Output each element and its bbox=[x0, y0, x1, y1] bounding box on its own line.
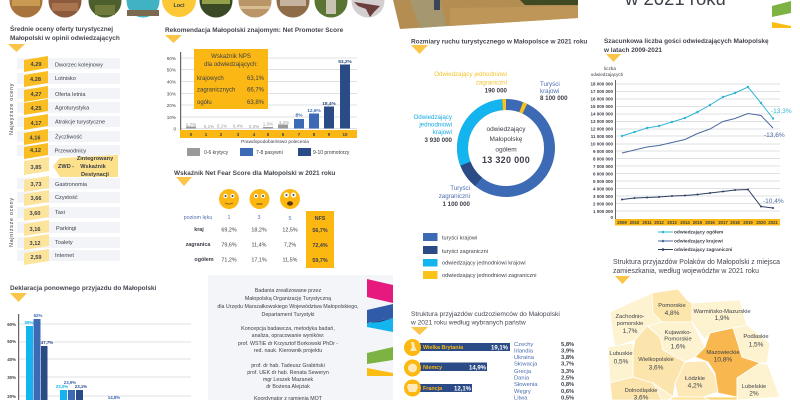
bar chart: NPS: 10% bbox=[167, 115, 176, 120]
bar chart: NPS: 8% bbox=[296, 112, 303, 118]
line chart: 2017 bbox=[718, 220, 728, 225]
ratings list: 4,28 bbox=[30, 77, 41, 83]
series: krajowi bbox=[622, 114, 773, 153]
photo strip: circular thumbnails bbox=[10, 0, 384, 18]
list: other countries: Grecja bbox=[514, 369, 532, 375]
ratings list: Toalety bbox=[55, 240, 73, 246]
bar chart: NPS: 30% bbox=[167, 92, 176, 96]
line chart bbox=[590, 80, 792, 226]
bar chart: NPS: 7 bbox=[298, 132, 301, 137]
icon: calm face bbox=[219, 189, 239, 209]
bars: top countries: 19,1% bbox=[491, 346, 509, 352]
ratings list: Czystość bbox=[55, 195, 78, 201]
line chart: 2020 bbox=[756, 220, 766, 225]
table: fear levels: 59,7% bbox=[312, 258, 328, 264]
map labels: Wielkopolskie bbox=[638, 357, 674, 363]
line chart: 17 000 000 bbox=[590, 89, 613, 94]
map labels: 0,5% bbox=[614, 358, 629, 366]
legend: odwiedzający krajowi bbox=[674, 238, 723, 244]
line chart: 2010 bbox=[630, 220, 640, 225]
ratings list: 4,25 bbox=[31, 106, 41, 112]
bar chart: return declaration: 62% bbox=[34, 313, 42, 318]
legend: odwiedzający ogółem bbox=[674, 230, 723, 236]
label: turyści krajowi: krajowi bbox=[540, 88, 559, 95]
callout: NPS values: 63,8% bbox=[247, 100, 265, 106]
photo: landscape banner bbox=[393, 0, 578, 29]
map labels: 4,8% bbox=[665, 310, 680, 317]
ratings list: Lotnisko bbox=[55, 76, 76, 82]
bar chart: NPS: 18,4% bbox=[322, 101, 337, 107]
label: turyści zagraniczni bbox=[439, 185, 471, 208]
line chart: 13 000 000 bbox=[590, 119, 613, 124]
map labels: Pomorskie bbox=[658, 303, 686, 309]
marker triangle bbox=[176, 177, 192, 186]
list: other countries: 5,8% bbox=[561, 342, 574, 348]
ratings list: 4,29 bbox=[31, 62, 41, 68]
series: zagraniczni bbox=[622, 190, 773, 208]
ratings list: Taxi bbox=[55, 210, 65, 216]
panel: research credits bbox=[208, 275, 393, 400]
table: fear levels: 12,5% bbox=[282, 228, 298, 234]
map labels: Łódzkie bbox=[685, 376, 705, 382]
map labels: 1,6% bbox=[671, 344, 686, 350]
list: other countries: Słowacja bbox=[514, 362, 538, 368]
map labels: Zachodnio- bbox=[615, 314, 645, 320]
heading: visitors trend: Szacunkowa liczba gości odwiedzających Małopolskę bbox=[604, 38, 769, 45]
label: turyści krajowi: 8 100 000 bbox=[540, 95, 568, 102]
line chart: 2009 bbox=[617, 220, 627, 225]
table: fear levels: NFS bbox=[315, 216, 326, 222]
callout: NPS values: dla odwiedzających: bbox=[204, 62, 258, 68]
ratings list: Atrakcje turystyczne bbox=[55, 120, 105, 126]
legend: odwiedzający jednodniowi krajowi bbox=[442, 260, 526, 266]
line chart: -10,4% bbox=[763, 198, 784, 205]
list: other countries: 3,3% bbox=[561, 369, 574, 375]
donut centre label: 13 320 000 bbox=[482, 155, 530, 165]
line chart: 1 000 000 bbox=[593, 209, 613, 214]
bar chart: return declaration: 14,8% bbox=[108, 395, 120, 400]
bar chart: NPS: 5 bbox=[267, 132, 270, 137]
line chart: 3 000 000 bbox=[593, 194, 613, 199]
list: other countries: 3,9% bbox=[561, 348, 574, 354]
label: jednodniowi krajowi bbox=[413, 114, 453, 144]
table: fear levels: 11,4% bbox=[252, 242, 267, 248]
panel: net fear score bbox=[174, 170, 335, 268]
bar chart: NPS: 0,3% bbox=[249, 124, 259, 129]
marker triangle bbox=[165, 35, 182, 43]
icon: neutral face bbox=[250, 189, 270, 209]
line chart: 2015 bbox=[693, 220, 703, 225]
line chart: 2018 bbox=[730, 220, 740, 225]
bar chart: return declaration: 47,7% bbox=[41, 340, 53, 345]
legend bbox=[187, 148, 350, 156]
line chart: -13,3% bbox=[771, 108, 792, 115]
ratings list: 4,17 bbox=[31, 121, 41, 127]
bar chart: return declaration: 50% bbox=[7, 339, 16, 344]
line chart: 2011 bbox=[642, 220, 652, 225]
series: ogółem bbox=[622, 87, 773, 136]
table: fear levels: 79,6% bbox=[221, 242, 237, 248]
callout: NPS values: 63,1% bbox=[247, 76, 265, 82]
legend: turyści zagraniczni bbox=[442, 249, 488, 255]
table: fear levels: 7,2% bbox=[284, 242, 296, 248]
bar chart: NPS: 3 bbox=[237, 132, 240, 137]
bars: top countries: 12,1% bbox=[454, 386, 472, 392]
bar chart: return declaration: 60% bbox=[7, 322, 16, 327]
credits text: prof. UEK dr hab. Renata Seweryn bbox=[247, 370, 329, 376]
ratings list: Przewodnicy bbox=[54, 148, 86, 154]
bar chart: NPS: 8 bbox=[313, 132, 316, 137]
donut centre label bbox=[482, 126, 530, 165]
map labels: Pomorskie bbox=[664, 336, 692, 342]
ribbon: top right bbox=[772, 1, 791, 28]
list: other countries: Ukraina bbox=[514, 355, 535, 361]
line chart: 4 000 000 bbox=[593, 186, 613, 192]
axis label: lowest ratings: Najniższe oceny bbox=[9, 197, 15, 247]
panel: domestic arrivals map bbox=[608, 259, 780, 400]
line chart: 11 000 000 bbox=[591, 134, 613, 139]
bars: top countries: Niemcy bbox=[423, 365, 442, 371]
bar chart: NPS: 50% bbox=[167, 68, 176, 72]
bar chart: NPS: 0 bbox=[190, 132, 193, 137]
map labels: 2% bbox=[749, 390, 759, 398]
line chart: 2019 bbox=[743, 220, 753, 225]
credits text: dr Bożena Alejziak bbox=[266, 384, 310, 390]
line chart: 16 000 000 bbox=[590, 96, 613, 102]
ribbon: credits bbox=[367, 279, 393, 376]
legend: odwiedzający jednodniowi zagraniczni bbox=[442, 273, 537, 279]
bars: top countries: Francja bbox=[423, 386, 443, 392]
line chart: 2012 bbox=[654, 220, 664, 225]
line chart: 8 000 000 bbox=[593, 156, 613, 162]
label: jednodniowi zagraniczni: 190 000 bbox=[485, 88, 508, 94]
callout: NPS values: Wskaźnik NPS bbox=[211, 54, 251, 60]
marker triangle bbox=[10, 293, 27, 302]
list: other countries: 0,6% bbox=[561, 389, 574, 395]
line chart: -13,6% bbox=[764, 132, 785, 139]
table: fear levels: 17,1% bbox=[251, 258, 267, 264]
panel: visitors trend bbox=[590, 38, 792, 253]
list: other countries: Węgry bbox=[514, 389, 531, 395]
panel: average ratings bbox=[8, 24, 120, 265]
label: jednodniowi krajowi: 3 930 000 bbox=[424, 137, 453, 144]
map labels: Warmińsko-Mazurskie bbox=[693, 309, 751, 315]
bar chart: NPS: 1,0% bbox=[263, 122, 273, 126]
ratings list: 3,66 bbox=[31, 196, 41, 202]
ratings list: 3,12 bbox=[30, 241, 40, 247]
ratings list: 3,85 bbox=[31, 165, 41, 171]
credits text bbox=[217, 288, 359, 400]
line chart: 7 000 000 bbox=[593, 164, 613, 169]
list: other countries: 2,5% bbox=[561, 376, 574, 382]
marker triangle bbox=[606, 54, 621, 62]
table: fear levels: kraj bbox=[194, 227, 204, 233]
table: fear levels: 5 bbox=[288, 216, 292, 222]
photo strip: circular thumbnails: Loci bbox=[173, 3, 185, 9]
ratings list: 3,73 bbox=[31, 182, 41, 188]
table: fear levels: 11,5% bbox=[283, 258, 298, 264]
legend bbox=[423, 233, 537, 279]
bar chart: return declaration: 30% bbox=[7, 375, 16, 380]
list: other countries bbox=[514, 342, 574, 400]
bar chart: NPS: 0 bbox=[173, 126, 176, 132]
panel: net promoter score bbox=[165, 27, 357, 156]
line chart: 14 000 000 bbox=[590, 112, 613, 116]
label: turyści krajowi bbox=[540, 81, 568, 102]
map labels: Lubelskie bbox=[742, 384, 766, 390]
bars: top countries: 14,9% bbox=[469, 366, 487, 372]
label: turyści zagraniczni: zagraniczni bbox=[439, 193, 470, 200]
map labels bbox=[609, 303, 769, 400]
ratings list bbox=[9, 56, 120, 265]
axis label: highest ratings: Najwyższe oceny bbox=[9, 83, 15, 135]
bar chart: return declaration: 20% bbox=[7, 394, 16, 399]
callout: NPS values: ogółu bbox=[197, 100, 212, 106]
table: fear levels: 18,2% bbox=[251, 228, 267, 234]
label: turyści krajowi: Turyści bbox=[540, 81, 560, 88]
map of Poland bbox=[608, 289, 780, 400]
line chart: 9 000 000 bbox=[593, 149, 613, 154]
bar chart: NPS: 40% bbox=[167, 80, 176, 84]
bars: top countries bbox=[404, 339, 510, 396]
bar chart: NPS: 10 bbox=[343, 132, 348, 137]
panel: foreign arrivals bbox=[404, 311, 574, 400]
axis title: liczba bbox=[604, 66, 616, 71]
ratings list: Internet bbox=[55, 253, 74, 259]
bar chart: NPS: 0,4% bbox=[233, 124, 243, 128]
bar chart: return declaration: 23,1% bbox=[75, 384, 87, 389]
bar chart: NPS: 1 bbox=[205, 132, 208, 137]
label: jednodniowi krajowi: krajowi bbox=[433, 129, 452, 136]
marker triangle bbox=[411, 327, 428, 335]
credits text: prof. dr hab. Tadeusz Grabiński bbox=[251, 363, 325, 369]
map labels: Dolnośląskie bbox=[625, 388, 657, 394]
ratings list: Agroturystyka bbox=[55, 106, 90, 112]
list: other countries: Dania bbox=[514, 376, 530, 382]
heading line 2: w 2021 roku według wybranych państw bbox=[410, 320, 526, 326]
map labels: 1,5% bbox=[749, 342, 764, 348]
list: other countries: Czechy bbox=[514, 342, 533, 348]
callout: NPS values bbox=[194, 49, 268, 109]
panel: return declaration bbox=[7, 285, 191, 400]
legend: 7-8 pasywni bbox=[256, 150, 283, 156]
marker triangle bbox=[615, 276, 630, 284]
map labels: Podlaskie bbox=[743, 334, 769, 340]
label: jednodniowi zagraniczni: zagraniczni bbox=[476, 80, 507, 86]
bar chart: NPS: 1,7% bbox=[186, 122, 196, 127]
list: other countries: 3,7% bbox=[561, 362, 574, 368]
list: other countries: Irlandia bbox=[514, 348, 534, 354]
bar chart: NPS: 0,1% bbox=[204, 124, 214, 129]
map labels: 3,6% bbox=[649, 364, 664, 372]
callout: NPS values: 66,7% bbox=[247, 88, 265, 94]
callout: NPS values: krajowych bbox=[197, 76, 224, 82]
heading: average ratings: Średnie oceny oferty turystycznej bbox=[10, 24, 113, 33]
bars: top countries: Wielka Brytania bbox=[423, 345, 464, 351]
ratings list: Oferta letnia bbox=[55, 92, 86, 98]
bar chart: return declaration: 40% bbox=[7, 357, 16, 362]
bar chart: return declaration bbox=[7, 313, 191, 400]
bar chart: return declaration: 23,9% bbox=[64, 380, 76, 385]
ratings list: Destynacji bbox=[81, 172, 109, 178]
legend: turyści krajowi bbox=[442, 236, 477, 242]
donut chart bbox=[462, 104, 550, 192]
axis title bbox=[591, 66, 624, 77]
bar chart: NPS: 4 bbox=[253, 132, 256, 137]
table: fear levels: 3 bbox=[258, 215, 260, 221]
heading: foreign arrivals: Struktura przyjazdów cudzoziemców do Małopolski bbox=[411, 311, 560, 318]
table: fear levels: 72,4% bbox=[312, 243, 328, 249]
ratings list: Parkingi bbox=[56, 226, 76, 232]
ratings list: Życzliwość bbox=[55, 134, 82, 140]
map labels: Mazowieckie bbox=[706, 350, 740, 356]
list: other countries: Słowenia bbox=[514, 382, 538, 388]
bar chart: NPS bbox=[167, 49, 357, 156]
donut centre label: ogółem bbox=[495, 146, 517, 154]
label: jednodniowi krajowi: jednodniowi bbox=[418, 122, 452, 128]
axis title: odwiedzających bbox=[591, 72, 624, 77]
line chart: 5 000 000 bbox=[593, 179, 613, 184]
credits text: mgr Leszek Mazanek bbox=[263, 377, 314, 383]
ratings list: ZWD - bbox=[58, 164, 74, 170]
credits text: dla Urzędu Marszałkowskiego Województwa Małopolskiego, bbox=[217, 304, 359, 310]
heading line 2: zamieszkania, według województw w 2021 roku bbox=[613, 268, 759, 275]
line chart: 2013 bbox=[667, 220, 677, 225]
bar chart: NPS: 12,6% bbox=[307, 108, 322, 114]
map labels: Kujawsko- bbox=[665, 330, 691, 336]
label: jednodniowi zagraniczni: Odwiedzający jednodniowi bbox=[434, 71, 507, 78]
map labels: 1,7% bbox=[623, 328, 638, 335]
ratings list: 3,60 bbox=[30, 211, 40, 217]
credits text: analiza, opracowanie wyników: bbox=[252, 333, 324, 339]
heading: return declaration: Deklaracja ponownego przyjazdu do Małopolski bbox=[10, 285, 157, 292]
ratings list: 4,27 bbox=[31, 92, 41, 98]
donut centre label: Małopolskę bbox=[490, 136, 523, 143]
panel: tourism volume bbox=[411, 38, 587, 279]
line chart: 2 000 000 bbox=[593, 202, 613, 206]
map labels: 4,2% bbox=[688, 382, 703, 390]
line chart: 18 000 000 bbox=[590, 82, 613, 86]
credits text: Małopolską Organizację Turystyczną bbox=[245, 296, 331, 302]
donut centre label: odwiedzający bbox=[486, 126, 526, 133]
credits text: Departament Turystyki bbox=[262, 312, 314, 318]
label: turyści zagraniczni: Turyści bbox=[450, 185, 470, 192]
bar chart: return declaration: 23,0% bbox=[56, 384, 68, 389]
bar chart: NPS: 20% bbox=[167, 103, 176, 108]
table: fear levels: 71,2% bbox=[221, 258, 237, 264]
heading: tourism volume: Rozmiary ruchu turystycznego w Małopolsce w 2021 roku bbox=[411, 38, 587, 46]
credits text: prof. WSTiE dr Krzysztof Borkowski PhDr - bbox=[238, 341, 338, 347]
label: jednodniowi zagraniczni bbox=[434, 71, 508, 94]
line chart: 12 000 000 bbox=[590, 126, 613, 132]
marker triangle bbox=[8, 44, 25, 52]
bar chart: NPS: 53,2% bbox=[338, 59, 353, 65]
list: other countries: 0,8% bbox=[561, 382, 574, 388]
legend: odwiedzający zagraniczni bbox=[674, 247, 732, 253]
table: fear levels: poziom lęku bbox=[184, 215, 212, 221]
bar chart: return declaration: 59% bbox=[25, 320, 33, 325]
bar chart: NPS: 60% bbox=[167, 56, 176, 61]
legend: 9-10 promotorzy bbox=[313, 150, 350, 156]
marker triangle bbox=[411, 45, 428, 54]
legend: 0-6 krytycy bbox=[204, 150, 229, 156]
callout: NPS values: zagranicznych bbox=[197, 88, 235, 94]
line chart: 15 000 000 bbox=[590, 104, 613, 109]
heading line 2: w latach 2009-2021 bbox=[603, 47, 662, 54]
ratings list: Zintegrowany bbox=[77, 156, 114, 162]
line chart: 2016 bbox=[705, 220, 715, 225]
line chart: 2021 bbox=[768, 220, 778, 225]
ratings list: Wskaźnik bbox=[80, 164, 107, 170]
bar chart: NPS: 2 bbox=[220, 132, 223, 137]
heading: average ratings: Małopolski w opinii odwiedzających bbox=[10, 35, 120, 42]
bar chart: NPS: 6 bbox=[282, 132, 285, 137]
map labels: Lubuskie bbox=[609, 351, 633, 357]
line chart: 2014 bbox=[680, 220, 690, 225]
ratings list: Dworzec kolejnowy bbox=[55, 62, 103, 68]
table: fear levels bbox=[184, 211, 334, 268]
label: jednodniowi krajowi: Odwiedzający bbox=[413, 114, 453, 121]
table: fear levels: zagranica bbox=[186, 242, 211, 248]
label: turyści zagraniczni: 1 100 000 bbox=[442, 201, 471, 208]
credits text: Badania zrealizowane przez bbox=[255, 288, 321, 294]
bar chart: NPS: 3,2% bbox=[279, 120, 289, 125]
line chart: 10 000 000 bbox=[590, 142, 613, 146]
icon: scared face bbox=[280, 189, 300, 209]
heading: domestic arrivals: Struktura przyjazdów Polaków do Małopolski z miejsca bbox=[613, 259, 780, 266]
heading: net fear score: Wskaźnik Net Fear Score dla Małopolski w 2021 roku bbox=[174, 170, 335, 177]
table: fear levels: 69,2% bbox=[221, 228, 237, 234]
axis title: Prawdopodobieństwo polecenia bbox=[241, 139, 309, 145]
ratings list: 3,16 bbox=[30, 227, 40, 233]
map labels: pomorskie bbox=[617, 321, 643, 327]
table: fear levels: 56,7% bbox=[312, 228, 328, 234]
ratings list: Gastronomia bbox=[55, 182, 88, 188]
map labels: 1,9% bbox=[715, 315, 730, 322]
bar chart: NPS: 9 bbox=[328, 132, 331, 137]
line chart: 6 000 000 bbox=[593, 172, 613, 176]
list: other countries: 3,8% bbox=[561, 355, 574, 361]
heading: average ratings bbox=[10, 24, 120, 42]
map labels: 10,8% bbox=[714, 356, 732, 364]
line chart: 0 bbox=[610, 215, 613, 220]
table: fear levels: 1 bbox=[228, 215, 230, 221]
legend bbox=[658, 230, 732, 253]
credits text: red. nauk. Kierownik projektu bbox=[254, 348, 322, 354]
ratings list: 2,59 bbox=[31, 255, 41, 261]
table: fear levels: ogółem bbox=[194, 257, 214, 263]
bar chart: NPS: 0,1% bbox=[217, 124, 227, 128]
credits text: Koncepcja badawcza, metodyka badań, bbox=[241, 326, 335, 332]
ratings list: 4,12 bbox=[30, 148, 41, 154]
ratings list: 4,16 bbox=[30, 136, 40, 142]
heading: net promoter score: Rekomendacja Małopolski znajomym: Net Promoter Score bbox=[165, 27, 344, 34]
